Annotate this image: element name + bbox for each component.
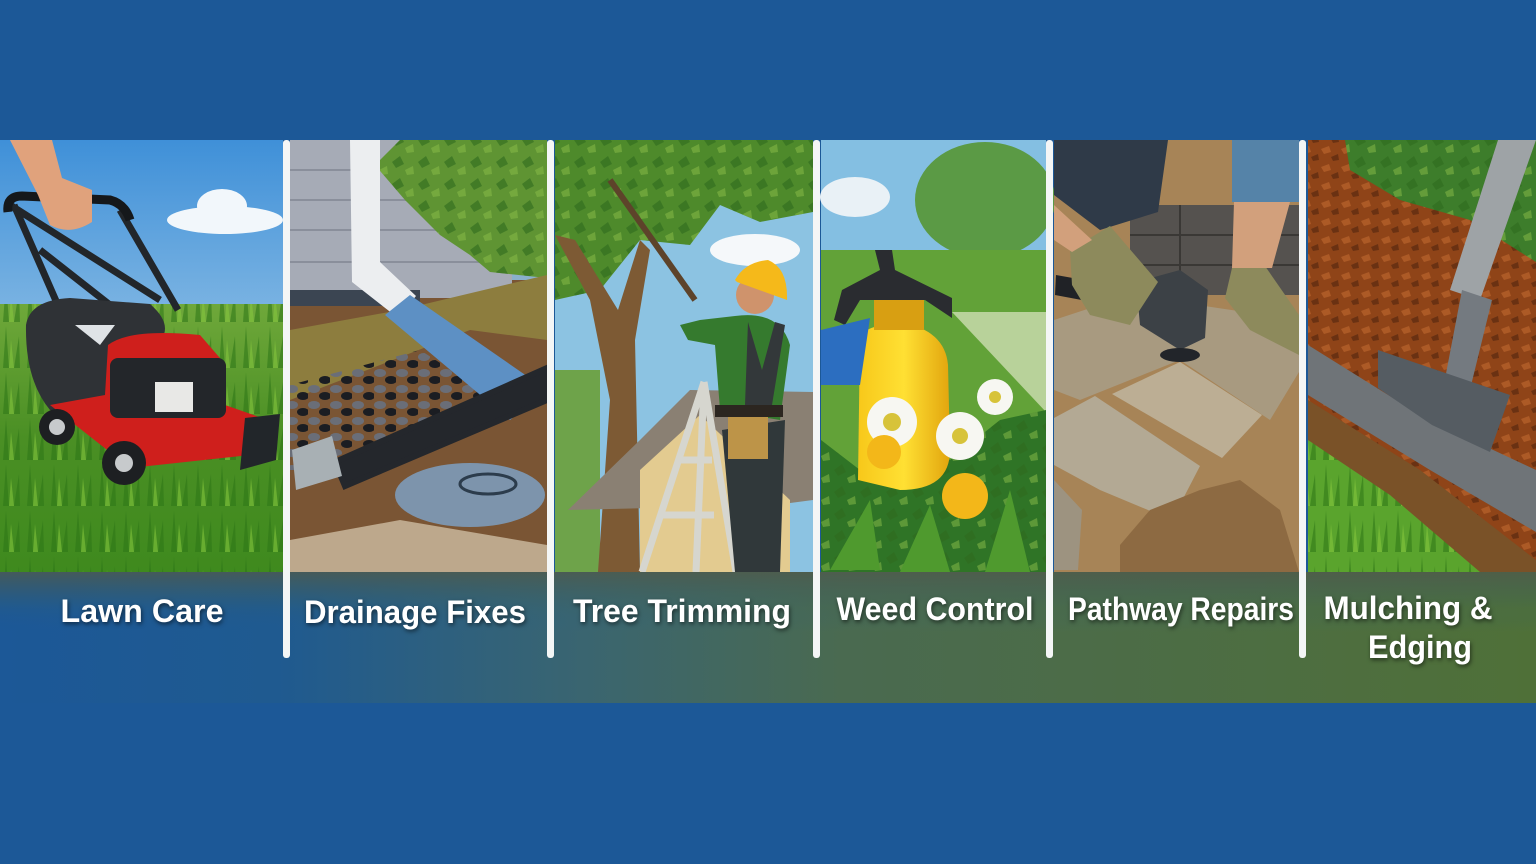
label: tree trimming: Tree Trimming (573, 593, 791, 629)
worker (680, 260, 790, 572)
icon: spade (1378, 140, 1536, 452)
dividers (283, 140, 1306, 658)
arms (1054, 202, 1290, 268)
panel: weed control (820, 140, 1055, 572)
label: mulching and edging (1324, 590, 1492, 665)
panel: mulching and edging (1308, 140, 1536, 572)
label: pathway repairs: Pathway Repairs (1068, 591, 1294, 627)
label: mulching and edging: Mulching & (1324, 590, 1492, 626)
caption band (0, 572, 1536, 703)
icon: gloves (1070, 226, 1299, 355)
house (568, 390, 813, 510)
panel: drainage fixes (290, 140, 547, 572)
panel: lawn care (0, 140, 283, 572)
icon: lawn mower (8, 196, 280, 485)
tree foliage (555, 140, 813, 300)
drain pipe (335, 368, 547, 486)
legs (1054, 140, 1168, 230)
icon: mallet (1055, 270, 1208, 362)
tree foliage (375, 140, 547, 278)
label: weed control: Weed Control (836, 591, 1034, 627)
icon: hand (10, 140, 92, 230)
label: drainage fixes: Drainage Fixes (304, 594, 526, 630)
downspout (350, 140, 416, 318)
tree trunk (555, 235, 650, 572)
water (385, 295, 547, 420)
ladder (642, 382, 736, 572)
panel: tree trimming (555, 140, 813, 572)
gravel bed (290, 275, 547, 400)
flowers (830, 379, 1030, 572)
panel: pathway repairs (1054, 140, 1299, 572)
label: mulching and edging: Edging (1368, 629, 1472, 665)
puddle (395, 463, 545, 527)
label: lawn care: Lawn Care (60, 593, 224, 629)
icon: spray bottle (821, 250, 952, 490)
metal edging (1308, 345, 1536, 532)
